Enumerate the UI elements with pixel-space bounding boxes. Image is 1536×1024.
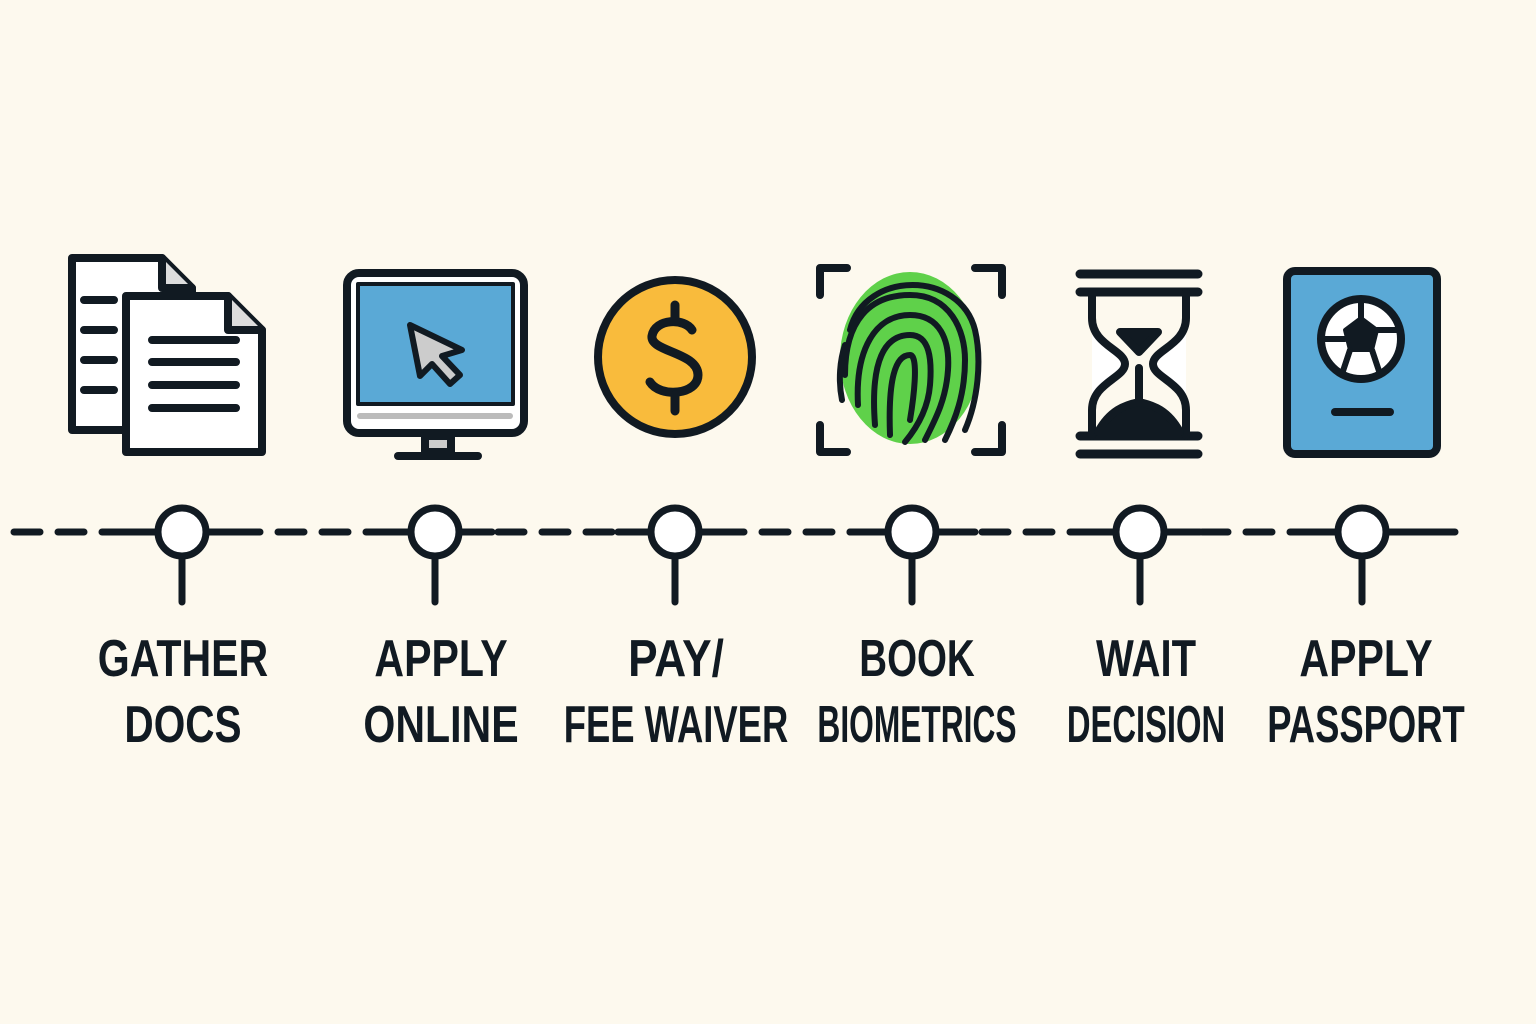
- label: apply passport: APPLY: [1299, 630, 1433, 688]
- label: apply passport: [1267, 630, 1465, 754]
- icon: fingerprint: [820, 268, 1002, 452]
- label: pay / fee waiver: PAY/: [628, 630, 724, 688]
- icon: documents: [72, 258, 262, 452]
- label: apply online: [363, 630, 519, 754]
- label: book biometrics: BOOK: [859, 630, 975, 688]
- label: pay / fee waiver: FEE WAIVER: [564, 696, 788, 754]
- timeline: [14, 508, 1455, 602]
- label: apply online: ONLINE: [363, 696, 519, 754]
- label: book biometrics: BIOMETRICS: [817, 696, 1017, 754]
- icon: computer monitor: [347, 273, 524, 456]
- icon: dollar coin: [598, 280, 752, 434]
- label: apply passport: PASSPORT: [1267, 696, 1465, 754]
- icon: passport: [1287, 271, 1437, 454]
- label: gather docs: DOCS: [124, 696, 242, 754]
- label: wait decision: WAIT: [1096, 630, 1196, 688]
- label: wait decision: DECISION: [1067, 696, 1225, 754]
- icon: hourglass: [1080, 274, 1198, 454]
- label: gather docs: [98, 630, 268, 754]
- label: book biometrics: [817, 630, 1017, 754]
- label: apply online: APPLY: [374, 630, 508, 688]
- label: wait decision: [1067, 630, 1225, 754]
- label: gather docs: GATHER: [98, 630, 268, 688]
- label: pay / fee waiver: [564, 630, 788, 754]
